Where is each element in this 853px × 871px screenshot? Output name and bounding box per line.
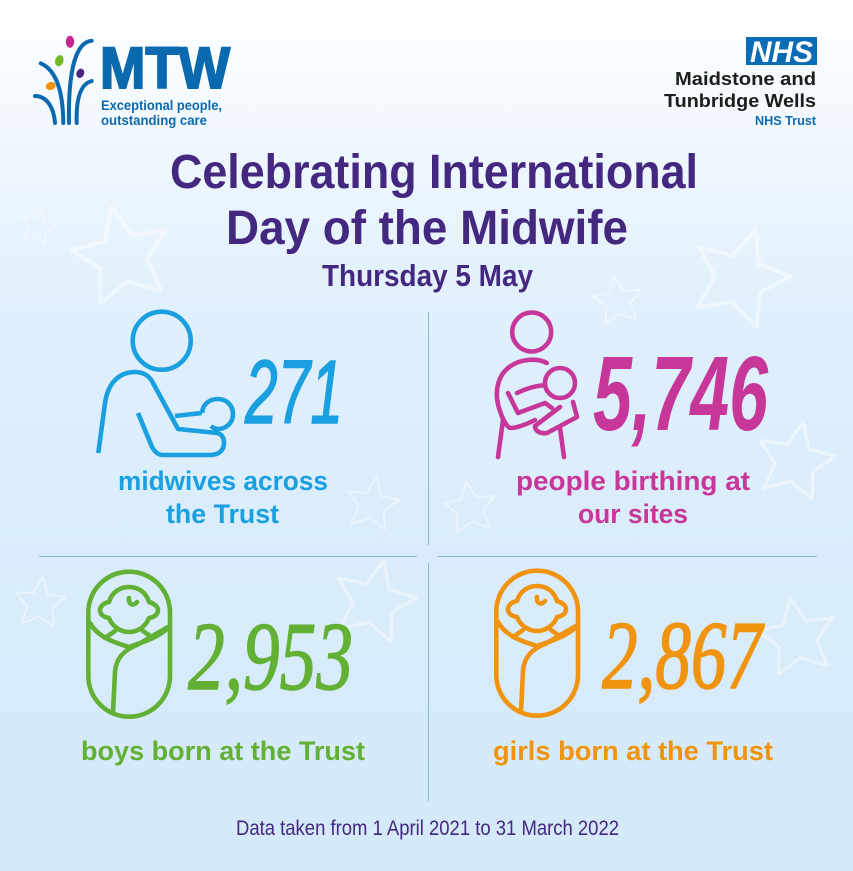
decorative stars — [13, 197, 841, 677]
panel: girls born — [493, 571, 773, 766]
logo: NHS Trust — [664, 36, 817, 128]
logo: NHS Trust: Tunbridge Wells — [664, 91, 816, 111]
label: our sites — [578, 499, 688, 529]
panel: boys born — [81, 572, 365, 766]
NHS lozenge — [746, 37, 817, 65]
label — [516, 466, 750, 529]
footer note: Data taken from 1 April 2021 to 31 March 2022 — [236, 817, 619, 840]
icon: parent cradling baby — [497, 312, 577, 457]
title: Celebrating International — [170, 146, 698, 199]
label: midwives across — [118, 466, 328, 496]
label: boys born at the Trust — [81, 736, 365, 766]
label: girls born at the Trust — [493, 736, 773, 766]
label: people birthing at — [516, 466, 750, 496]
logo: MTW: outstanding care — [101, 112, 207, 128]
panel: people birthing — [497, 312, 769, 529]
title — [170, 146, 698, 255]
dividers — [39, 312, 817, 801]
label — [118, 466, 328, 529]
tagline: Exceptional people, — [101, 97, 222, 113]
MTW wordmark: MTW — [100, 36, 230, 101]
stat: 271: 271 — [244, 343, 343, 443]
panel: midwives — [98, 312, 343, 529]
icon: swaddled baby, green — [88, 572, 170, 717]
logo: NHS Trust: NHS — [750, 36, 813, 69]
icon: MTW sprigs — [35, 36, 92, 123]
icon: midwife holding baby — [98, 312, 233, 455]
logo: MTW — [35, 36, 230, 128]
stat: 2,867: 2,867 — [602, 602, 765, 710]
trust name: Maidstone and — [675, 69, 816, 89]
logo: NHS Trust: NHS Trust — [755, 113, 817, 128]
stat: 5,746: 5,746 — [593, 335, 769, 453]
stat: 2,953: 2,953 — [188, 603, 353, 711]
title: Day of the Midwife — [226, 202, 628, 255]
label: the Trust — [166, 499, 279, 529]
subtitle: Thursday 5 May — [322, 258, 534, 293]
icon: swaddled baby, orange — [496, 571, 578, 716]
